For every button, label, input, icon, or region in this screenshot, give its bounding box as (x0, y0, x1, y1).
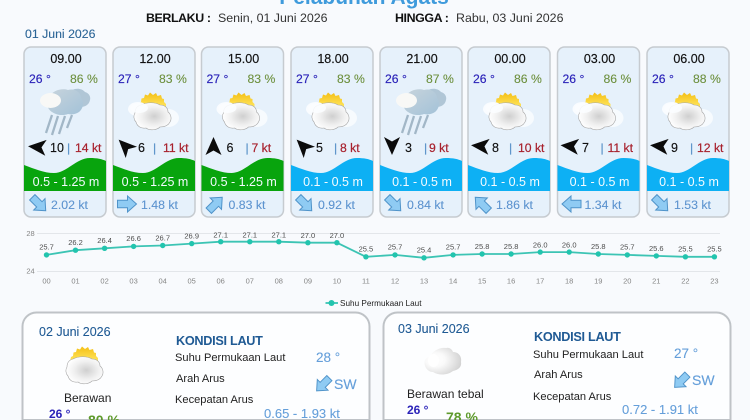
x axis labels: 02 (100, 276, 109, 286)
current speed: 1.34 kt (584, 198, 622, 212)
current speed row (533, 391, 698, 417)
data line (46, 242, 714, 258)
panel: 03.00 forecast (558, 47, 640, 217)
x axis labels: 15 (478, 276, 486, 286)
panel: 21.00 forecast (380, 47, 462, 217)
sea surface temperature row: Suhu Permukaan Laut (533, 349, 643, 361)
date heading: 03 Juni 2026 (398, 322, 470, 336)
temperature: 26 ° (385, 72, 407, 86)
current speed: 0.92 kt (318, 198, 355, 212)
chart legend: Suhu Permukaan Laut (340, 299, 422, 308)
heading: sea conditions: KONDISI LAUT (176, 334, 263, 348)
wind speed: 9 (671, 141, 678, 155)
wave height: 0.1 - 0.5 m (570, 175, 629, 189)
x axis labels: 06 (217, 276, 225, 286)
wind speed: 3 (405, 141, 412, 155)
wave height (113, 158, 195, 191)
time: 03.00 (584, 52, 615, 66)
humidity: 83 % (159, 72, 187, 86)
icon: current arrow (118, 196, 136, 212)
wave height (647, 158, 729, 191)
wind speed: 6 (226, 141, 234, 155)
icon: sun and cloud (216, 92, 268, 130)
icon: wind arrow (113, 134, 137, 158)
data values: 26.4 (97, 236, 112, 245)
wind speed: 11 kt (608, 141, 634, 155)
wave height (468, 158, 550, 191)
panel: 02 Juni 2026 (22, 312, 370, 420)
icon: current arrow (470, 192, 494, 216)
weather label: Berawan tebal (407, 387, 484, 401)
temperature: 27 ° (206, 72, 228, 86)
temperature: 27 ° (296, 72, 318, 86)
time: 12.00 (139, 52, 171, 66)
wave height (291, 158, 373, 191)
heading: sea conditions: KONDISI LAUT (534, 330, 621, 344)
icon: wind arrow (649, 137, 669, 155)
data values: 25.7 (620, 242, 635, 252)
humidity: 83 % (337, 72, 365, 86)
wave height (24, 158, 106, 191)
wind speed: 11 kt (163, 141, 189, 155)
validity: until: Rabu, 03 Juni 2026 (456, 11, 564, 25)
humidity: 86 % (514, 72, 542, 86)
time: 09.00 (50, 52, 82, 66)
wind speed: | (153, 141, 156, 155)
wave height: 0.1 - 0.5 m (480, 175, 540, 189)
x axis labels: 05 (188, 276, 196, 286)
humidity: 86 % (604, 72, 631, 86)
validity: from: Senin, 01 Juni 2026 (218, 11, 328, 25)
current speed: 0.83 kt (228, 198, 266, 212)
wind speed: 7 kt (252, 141, 272, 155)
x axis labels: 07 (246, 276, 254, 286)
wind speed: 9 kt (429, 141, 449, 155)
humidity: 86 % (70, 72, 98, 86)
current speed row: Kecepatan Arus (175, 394, 254, 406)
current speed row: 0.72 - 1.91 kt (622, 402, 698, 417)
x axis labels: 10 (333, 276, 341, 286)
icon: wind arrow (384, 137, 400, 155)
sea surface temperature row (175, 350, 340, 365)
current speed: 1.48 kt (141, 198, 178, 212)
data values: 25.5 (707, 244, 722, 254)
panel: 00.00 forecast (468, 47, 550, 217)
x axis labels: 23 (710, 276, 719, 286)
time: 21.00 (406, 52, 438, 66)
wave height (380, 158, 462, 191)
humidity: 87 % (426, 72, 454, 86)
wave height (202, 158, 284, 191)
wave height: 0.1 - 0.5 m (659, 175, 719, 189)
data values: 25.7 (446, 242, 460, 252)
date heading: 02 Juni 2026 (39, 325, 111, 339)
data values: 27.0 (301, 231, 315, 240)
wave height: 0.5 - 1.25 m (210, 175, 277, 189)
current speed: 1.86 kt (496, 198, 533, 212)
x axis labels: 18 (565, 276, 573, 286)
x axis labels: 00 (42, 276, 51, 286)
icon: sun and cloud (572, 92, 624, 130)
icon: wind arrow (206, 137, 222, 155)
x axis labels: 13 (420, 276, 428, 286)
wave height: 0.1 - 0.5 m (392, 175, 452, 189)
data points (44, 239, 717, 260)
data values: 26.7 (155, 234, 170, 242)
data values: 26.9 (184, 232, 199, 240)
line chart: sea surface temperature (26, 229, 722, 286)
data values: 26.2 (68, 238, 83, 247)
validity: until (395, 11, 564, 25)
wind speed: 5 (316, 141, 323, 155)
wave height: 0.5 - 1.25 m (122, 175, 188, 189)
current direction row: Arah Arus (534, 369, 583, 381)
icon: current arrow (293, 192, 317, 216)
current speed: 0.84 kt (407, 198, 444, 212)
x axis labels: 12 (391, 276, 399, 286)
time: 00.00 (494, 52, 526, 66)
x axis labels: 21 (652, 276, 660, 286)
data values: 25.7 (388, 242, 402, 252)
panel: 03 Juni 2026 (384, 312, 730, 420)
y axis labels (26, 229, 35, 276)
data values: 27.1 (271, 230, 286, 240)
data values: 25.5 (359, 244, 373, 254)
icon: sun and cloud (306, 92, 357, 130)
wave height: 0.5 - 1.25 m (33, 175, 99, 189)
wave height: 0.1 - 0.5 m (303, 175, 363, 189)
icon: wind arrow (27, 138, 47, 156)
x axis labels: 16 (507, 276, 515, 286)
wind speed: 14 kt (75, 141, 102, 155)
sea surface temperature row: Suhu Permukaan Laut (175, 352, 285, 364)
x axis labels (42, 276, 719, 286)
humidity: 83 % (248, 72, 275, 86)
sea surface temperature row: 27 ° (674, 346, 698, 361)
time: 06.00 (673, 52, 705, 66)
y axis labels: 24 (26, 266, 35, 276)
data values: 25.8 (504, 242, 518, 251)
icon: sun and cloud (128, 92, 179, 130)
x axis labels: 19 (594, 276, 602, 286)
wind speed: 6 (138, 141, 145, 155)
sea surface temperature row (533, 346, 698, 361)
panel: 12.00 forecast (113, 47, 195, 217)
icon: current arrow (382, 192, 406, 216)
data values: 25.8 (591, 242, 606, 251)
data values: 26.6 (126, 234, 141, 243)
weather label: Berawan (64, 391, 111, 405)
icon: current arrow (27, 192, 51, 216)
current speed row (175, 394, 340, 420)
data values: 25.5 (678, 244, 693, 254)
current direction row (176, 373, 357, 396)
icon: wind arrow (470, 137, 490, 155)
validity: until: HINGGA : (395, 11, 448, 25)
current direction row: Arah Arus (176, 373, 225, 385)
temperature: 26 ° (652, 72, 674, 86)
wind speed: | (334, 141, 337, 155)
icon: sun and cloud (66, 346, 103, 384)
wind speed: | (509, 141, 512, 155)
current direction row (534, 369, 715, 393)
x axis labels: 04 (159, 276, 167, 286)
wind speed: | (690, 141, 693, 155)
icon: wind arrow (291, 134, 315, 158)
icon: current arrow (562, 196, 581, 212)
data values: 26.0 (533, 240, 548, 250)
y axis labels: 28 (26, 229, 35, 238)
heading: current date: 01 Juni 2026 (25, 27, 96, 41)
data values: 25.6 (649, 244, 664, 253)
icon: sun and cloud (483, 92, 534, 130)
temperature: 26 ° (562, 72, 584, 86)
wind speed: | (67, 141, 70, 155)
current speed: 1.53 kt (674, 198, 711, 212)
icon: thick cloud (424, 348, 461, 375)
wind speed: | (424, 141, 427, 155)
time: 15.00 (228, 52, 259, 66)
data values: 27.0 (330, 231, 344, 240)
icon: current arrow (203, 192, 228, 216)
validity: from (146, 11, 328, 25)
panel: 15.00 forecast (202, 47, 284, 217)
x axis labels: 11 (362, 276, 370, 286)
panel: 09.00 forecast (24, 47, 106, 217)
current speed row: Kecepatan Arus (533, 391, 612, 403)
data values: 27.1 (213, 230, 228, 240)
temperature: 26 ° (473, 72, 495, 86)
icon: wind arrow (560, 137, 579, 155)
data values: 25.8 (475, 242, 489, 251)
sea surface temperature row: 28 ° (316, 350, 340, 365)
wind speed: | (246, 141, 249, 155)
icon: current arrow (649, 192, 673, 216)
time: 18.00 (317, 52, 349, 66)
current speed: 2.02 kt (51, 198, 88, 212)
x axis labels: 08 (275, 276, 283, 286)
wind speed: 8 kt (340, 141, 360, 155)
wave height (558, 158, 640, 191)
current direction row: SW (334, 376, 357, 392)
icon: rain cloud (40, 89, 90, 135)
data values: 27.1 (242, 230, 257, 240)
x axis labels: 14 (449, 276, 457, 286)
x axis labels: 22 (681, 276, 690, 286)
panel: 18.00 forecast (291, 47, 373, 217)
x axis labels: 20 (623, 276, 631, 286)
wind speed: | (600, 141, 604, 155)
humidity: 88 % (693, 72, 721, 86)
wind speed: 10 kt (518, 141, 545, 155)
panel: 06.00 forecast (647, 47, 729, 217)
data values (39, 230, 722, 254)
data values: 25.7 (39, 242, 54, 252)
wind speed: 10 (50, 141, 64, 155)
current direction row: SW (692, 372, 715, 388)
wind speed: 7 (582, 141, 589, 155)
wind speed: 8 (492, 141, 499, 155)
icon: sun and cloud (662, 92, 713, 130)
temperature: 26 ° (29, 72, 51, 86)
data values: 25.4 (417, 246, 431, 254)
wind speed: 12 kt (697, 141, 724, 155)
x axis labels: 01 (71, 276, 80, 286)
data values: 26.0 (562, 240, 577, 250)
icon: rain cloud (396, 89, 446, 135)
temperature: 26 ° (407, 403, 429, 417)
x axis labels: 17 (536, 276, 544, 286)
x axis labels: 09 (304, 276, 312, 286)
temperature: 27 ° (118, 72, 140, 86)
x axis labels: 03 (129, 276, 138, 286)
validity: from: BERLAKU : (146, 11, 211, 25)
